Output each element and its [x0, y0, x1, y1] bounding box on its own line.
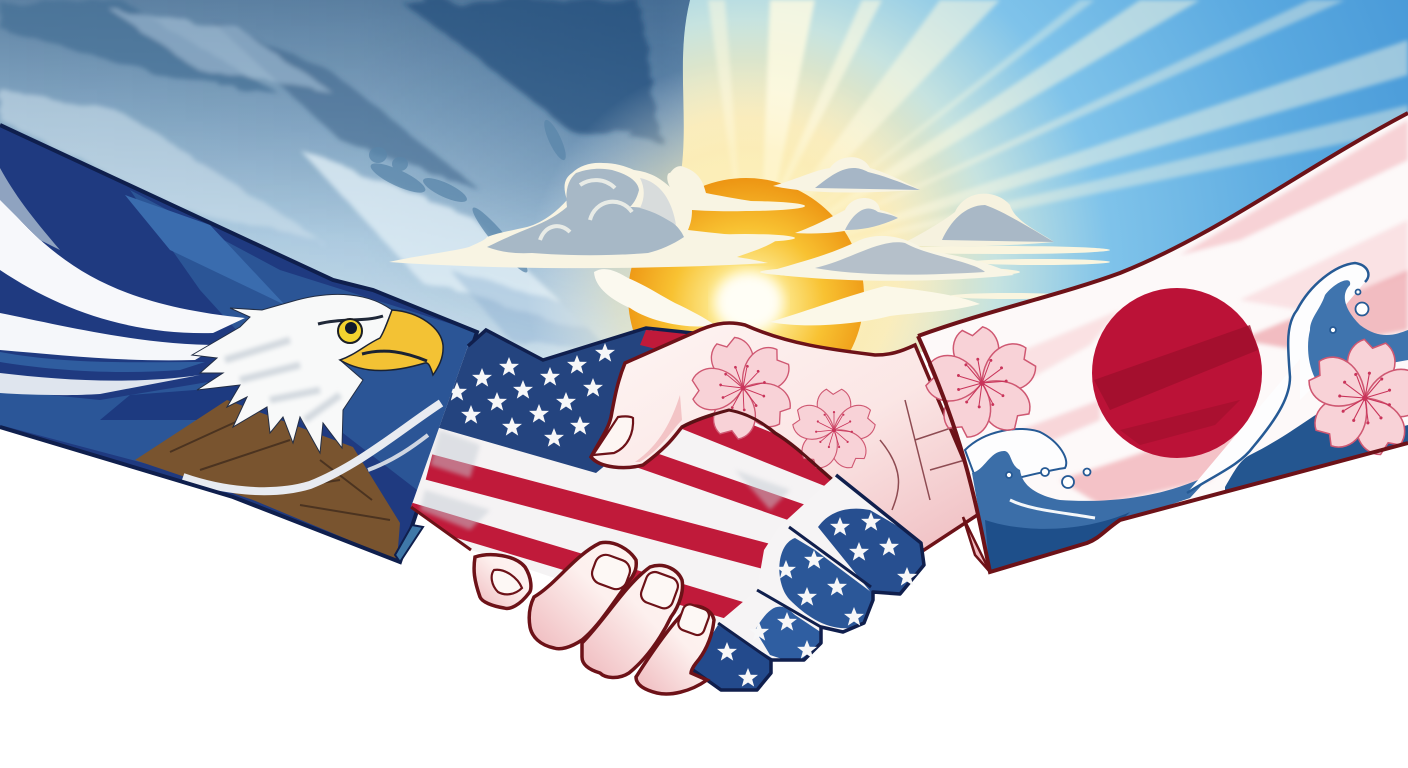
hand lower edge redraw: [682, 410, 836, 483]
panel: sky: [0, 0, 1408, 358]
left big cloud inner puffs: [540, 180, 632, 240]
sleeve pink streaks: [1000, 120, 1408, 505]
lower bright cloud: [770, 286, 980, 325]
finger separators: [718, 527, 871, 660]
cloud wisps: [685, 201, 1110, 299]
japanese hand: [591, 322, 985, 552]
icon: cherry blossom on hand upper: [675, 322, 812, 456]
icon: cherry blossom at far right: [1293, 330, 1408, 468]
thumb nail: [593, 416, 633, 455]
red sun disc: [1092, 288, 1262, 458]
upper right cloud: [773, 157, 920, 192]
wave: left body: [972, 451, 1213, 575]
sun: [628, 178, 864, 350]
white sash: [183, 403, 441, 491]
wave: right crest line: [1187, 263, 1368, 493]
hand creases: [880, 400, 965, 510]
sleeve lighter blue panels: [130, 190, 477, 500]
storm spatter: [367, 118, 570, 277]
sun bright core: [715, 272, 783, 332]
far right cloud: [900, 194, 1054, 246]
sun glow: [542, 78, 925, 353]
left sleeve: [0, 125, 477, 562]
thumb shading: [635, 395, 682, 462]
left big cloud highlight: [640, 178, 676, 225]
fingernails: [492, 552, 711, 637]
cuff flap: [963, 517, 990, 572]
wave: left deep water: [985, 512, 1130, 575]
storm streaks: [0, 0, 660, 350]
upper right cloud shade: [815, 168, 920, 190]
sleeve cuff flap: [395, 525, 423, 562]
icon: cherry blossom on hand lower: [790, 389, 878, 473]
right sleeve outline: [918, 113, 1408, 572]
far right cloud shade: [942, 205, 1054, 242]
sleeve outline: [0, 125, 477, 562]
canton red corner: [640, 330, 686, 348]
lower right cloud: [764, 236, 1014, 281]
flesh fingers: [474, 542, 714, 694]
white puff cloud: [594, 269, 715, 326]
blue starred fingers: [690, 475, 930, 695]
blue fingers outline: [693, 475, 924, 690]
canton: [439, 330, 654, 473]
middle cloud: [795, 198, 898, 234]
sky: stormy left half: [0, 0, 690, 358]
red stripes: [411, 416, 830, 618]
wave: left curl foam: [965, 429, 1066, 490]
icon: eagle head: [192, 294, 443, 453]
american flag hand: [400, 328, 850, 625]
eagle body feathers: [135, 400, 400, 560]
lower right cloud shade: [815, 242, 985, 275]
wave: lower dark swell: [1225, 412, 1408, 500]
finger stars: [717, 512, 917, 687]
icon: cherry blossom on sleeve: [914, 318, 1051, 450]
finger 3 blue: [755, 607, 825, 665]
icon: eagle eye: [338, 319, 362, 343]
canton stars: [447, 343, 615, 447]
light rays on the right: [707, 0, 1408, 236]
finger 1 blue: [818, 508, 922, 592]
foam dots: [1006, 468, 1090, 488]
left big cloud shade: [487, 169, 684, 255]
wave: right crest body: [1308, 280, 1408, 387]
middle cloud shade: [845, 208, 898, 230]
white feather swooshes: [0, 197, 245, 333]
finger 4 blue: [690, 625, 775, 695]
sky: bright right half: [682, 0, 1408, 354]
grey stripe shading: [420, 430, 790, 530]
finger 2 blue: [779, 538, 875, 628]
right sleeve: [914, 113, 1408, 575]
left big cloud: [389, 163, 782, 268]
clouds: [389, 157, 1110, 326]
sun dark bands: [1094, 325, 1258, 445]
